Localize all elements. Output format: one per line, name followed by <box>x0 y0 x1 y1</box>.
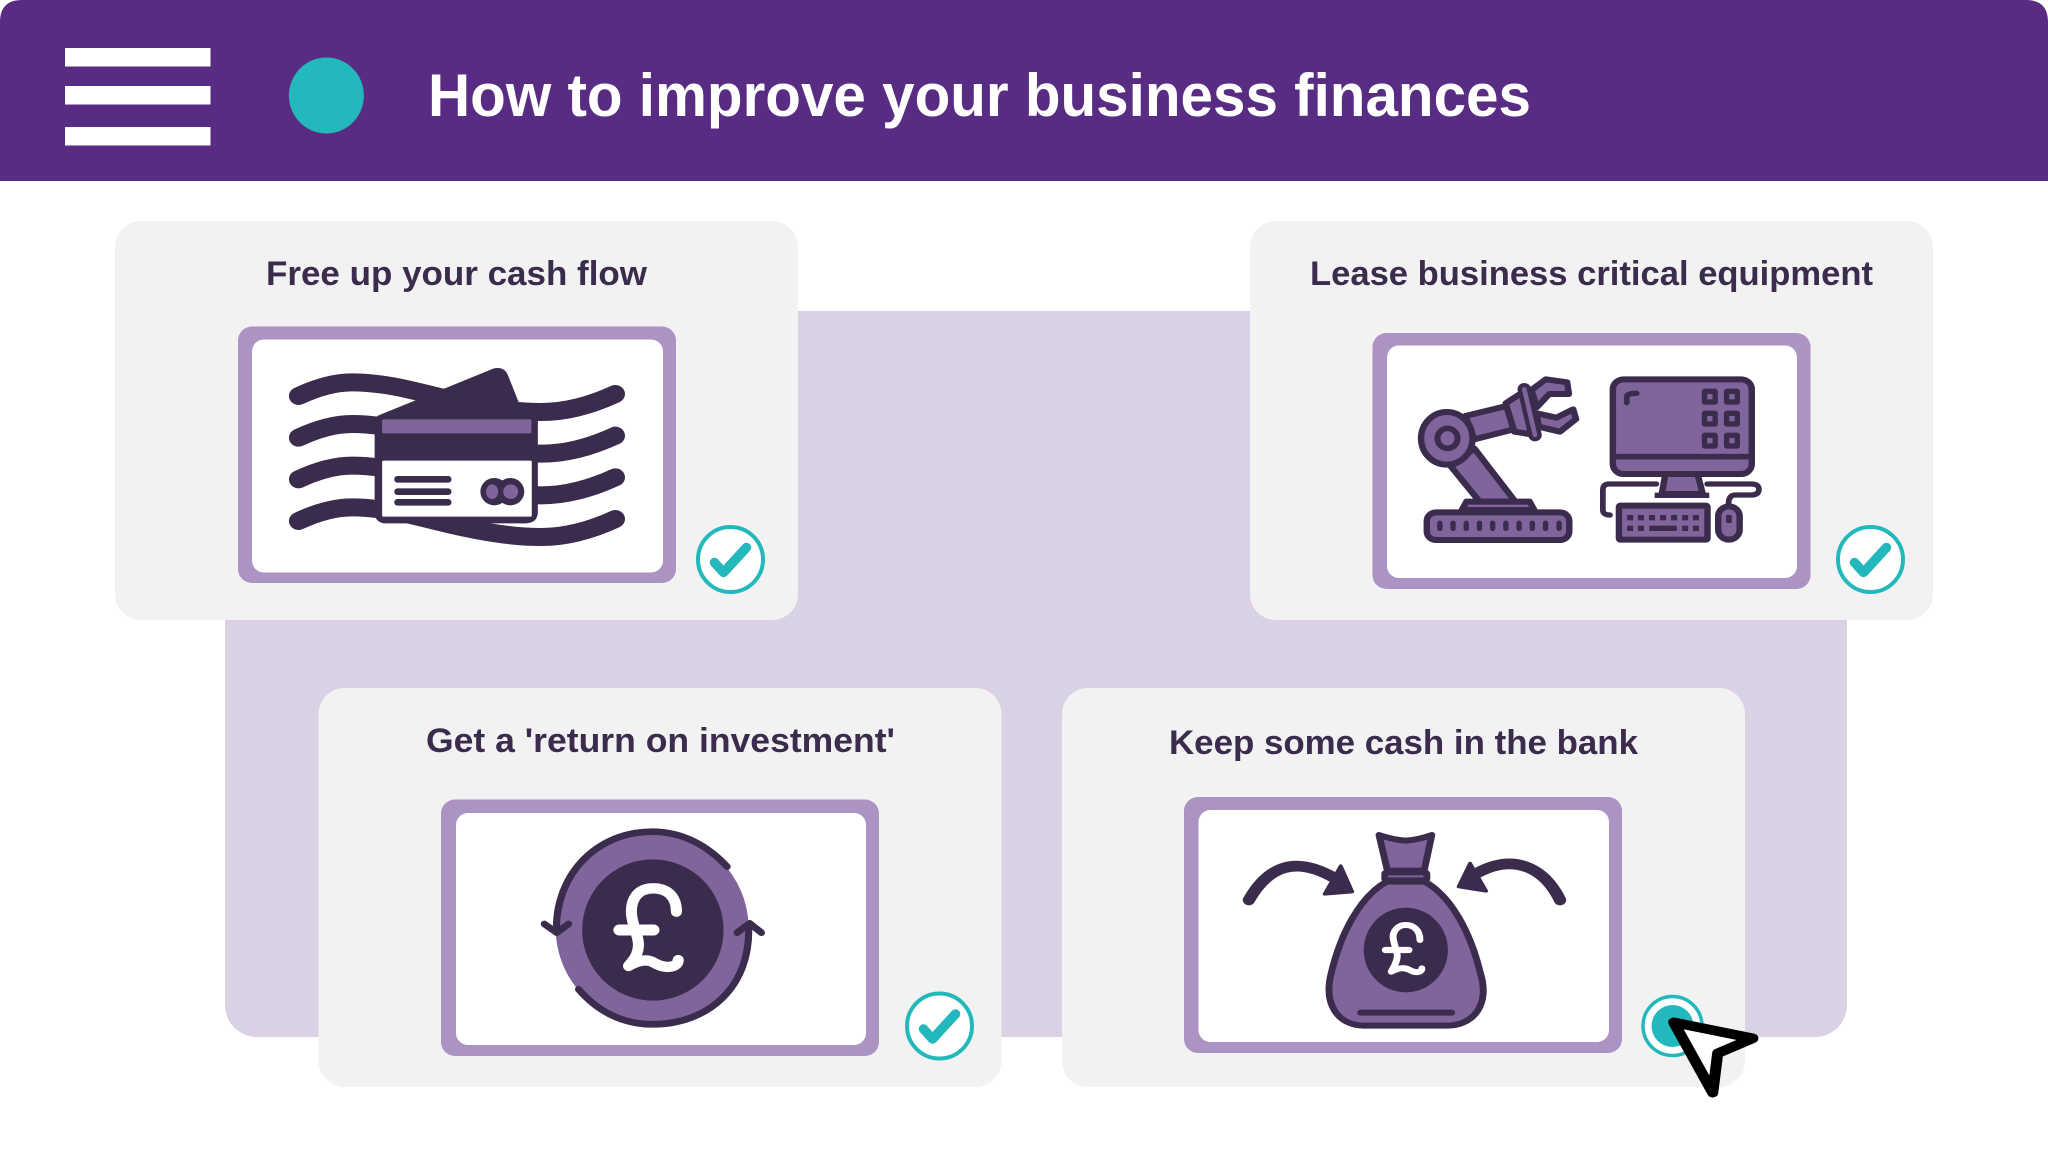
image frame <box>1372 333 1810 589</box>
computer <box>1603 379 1759 540</box>
heading: keep some cash in the bank: Keep some cash in the bank <box>1169 724 1638 762</box>
icon: money bag with inward arrows <box>1249 835 1560 1026</box>
panel: keep some cash in the bank <box>1062 688 1745 1087</box>
background panel <box>225 311 1847 1037</box>
icon: credit card with waves <box>299 368 615 537</box>
icon: completed check <box>907 994 972 1058</box>
image frame <box>441 800 879 1056</box>
heading: free up your cash flow: Free up your cash flow <box>266 255 648 293</box>
title: How to improve your business finances <box>428 62 1531 129</box>
icon: active selection dot <box>1643 996 1702 1056</box>
heading: get a return on investment: Get a 'return on investment' <box>426 722 895 760</box>
header bar <box>0 0 2048 181</box>
icon: pound coin with circular arrows <box>544 832 761 1024</box>
icon: hamburger menu <box>65 48 210 146</box>
heading: lease business critical equipment: Lease business critical equipment <box>1310 255 1873 293</box>
icon: completed check <box>1838 527 1903 592</box>
icon: mouse cursor <box>1674 1022 1753 1093</box>
icon: teal status dot <box>289 58 364 134</box>
panel: lease business critical equipment <box>1250 221 1933 620</box>
image frame <box>1184 797 1622 1053</box>
robot arm <box>1421 379 1576 540</box>
panel: get a return on investment <box>318 688 1002 1087</box>
icon: robot arm and computer <box>1421 379 1759 540</box>
image frame <box>238 326 676 583</box>
icon: completed check <box>698 527 763 592</box>
panel: free up your cash flow <box>115 221 798 620</box>
